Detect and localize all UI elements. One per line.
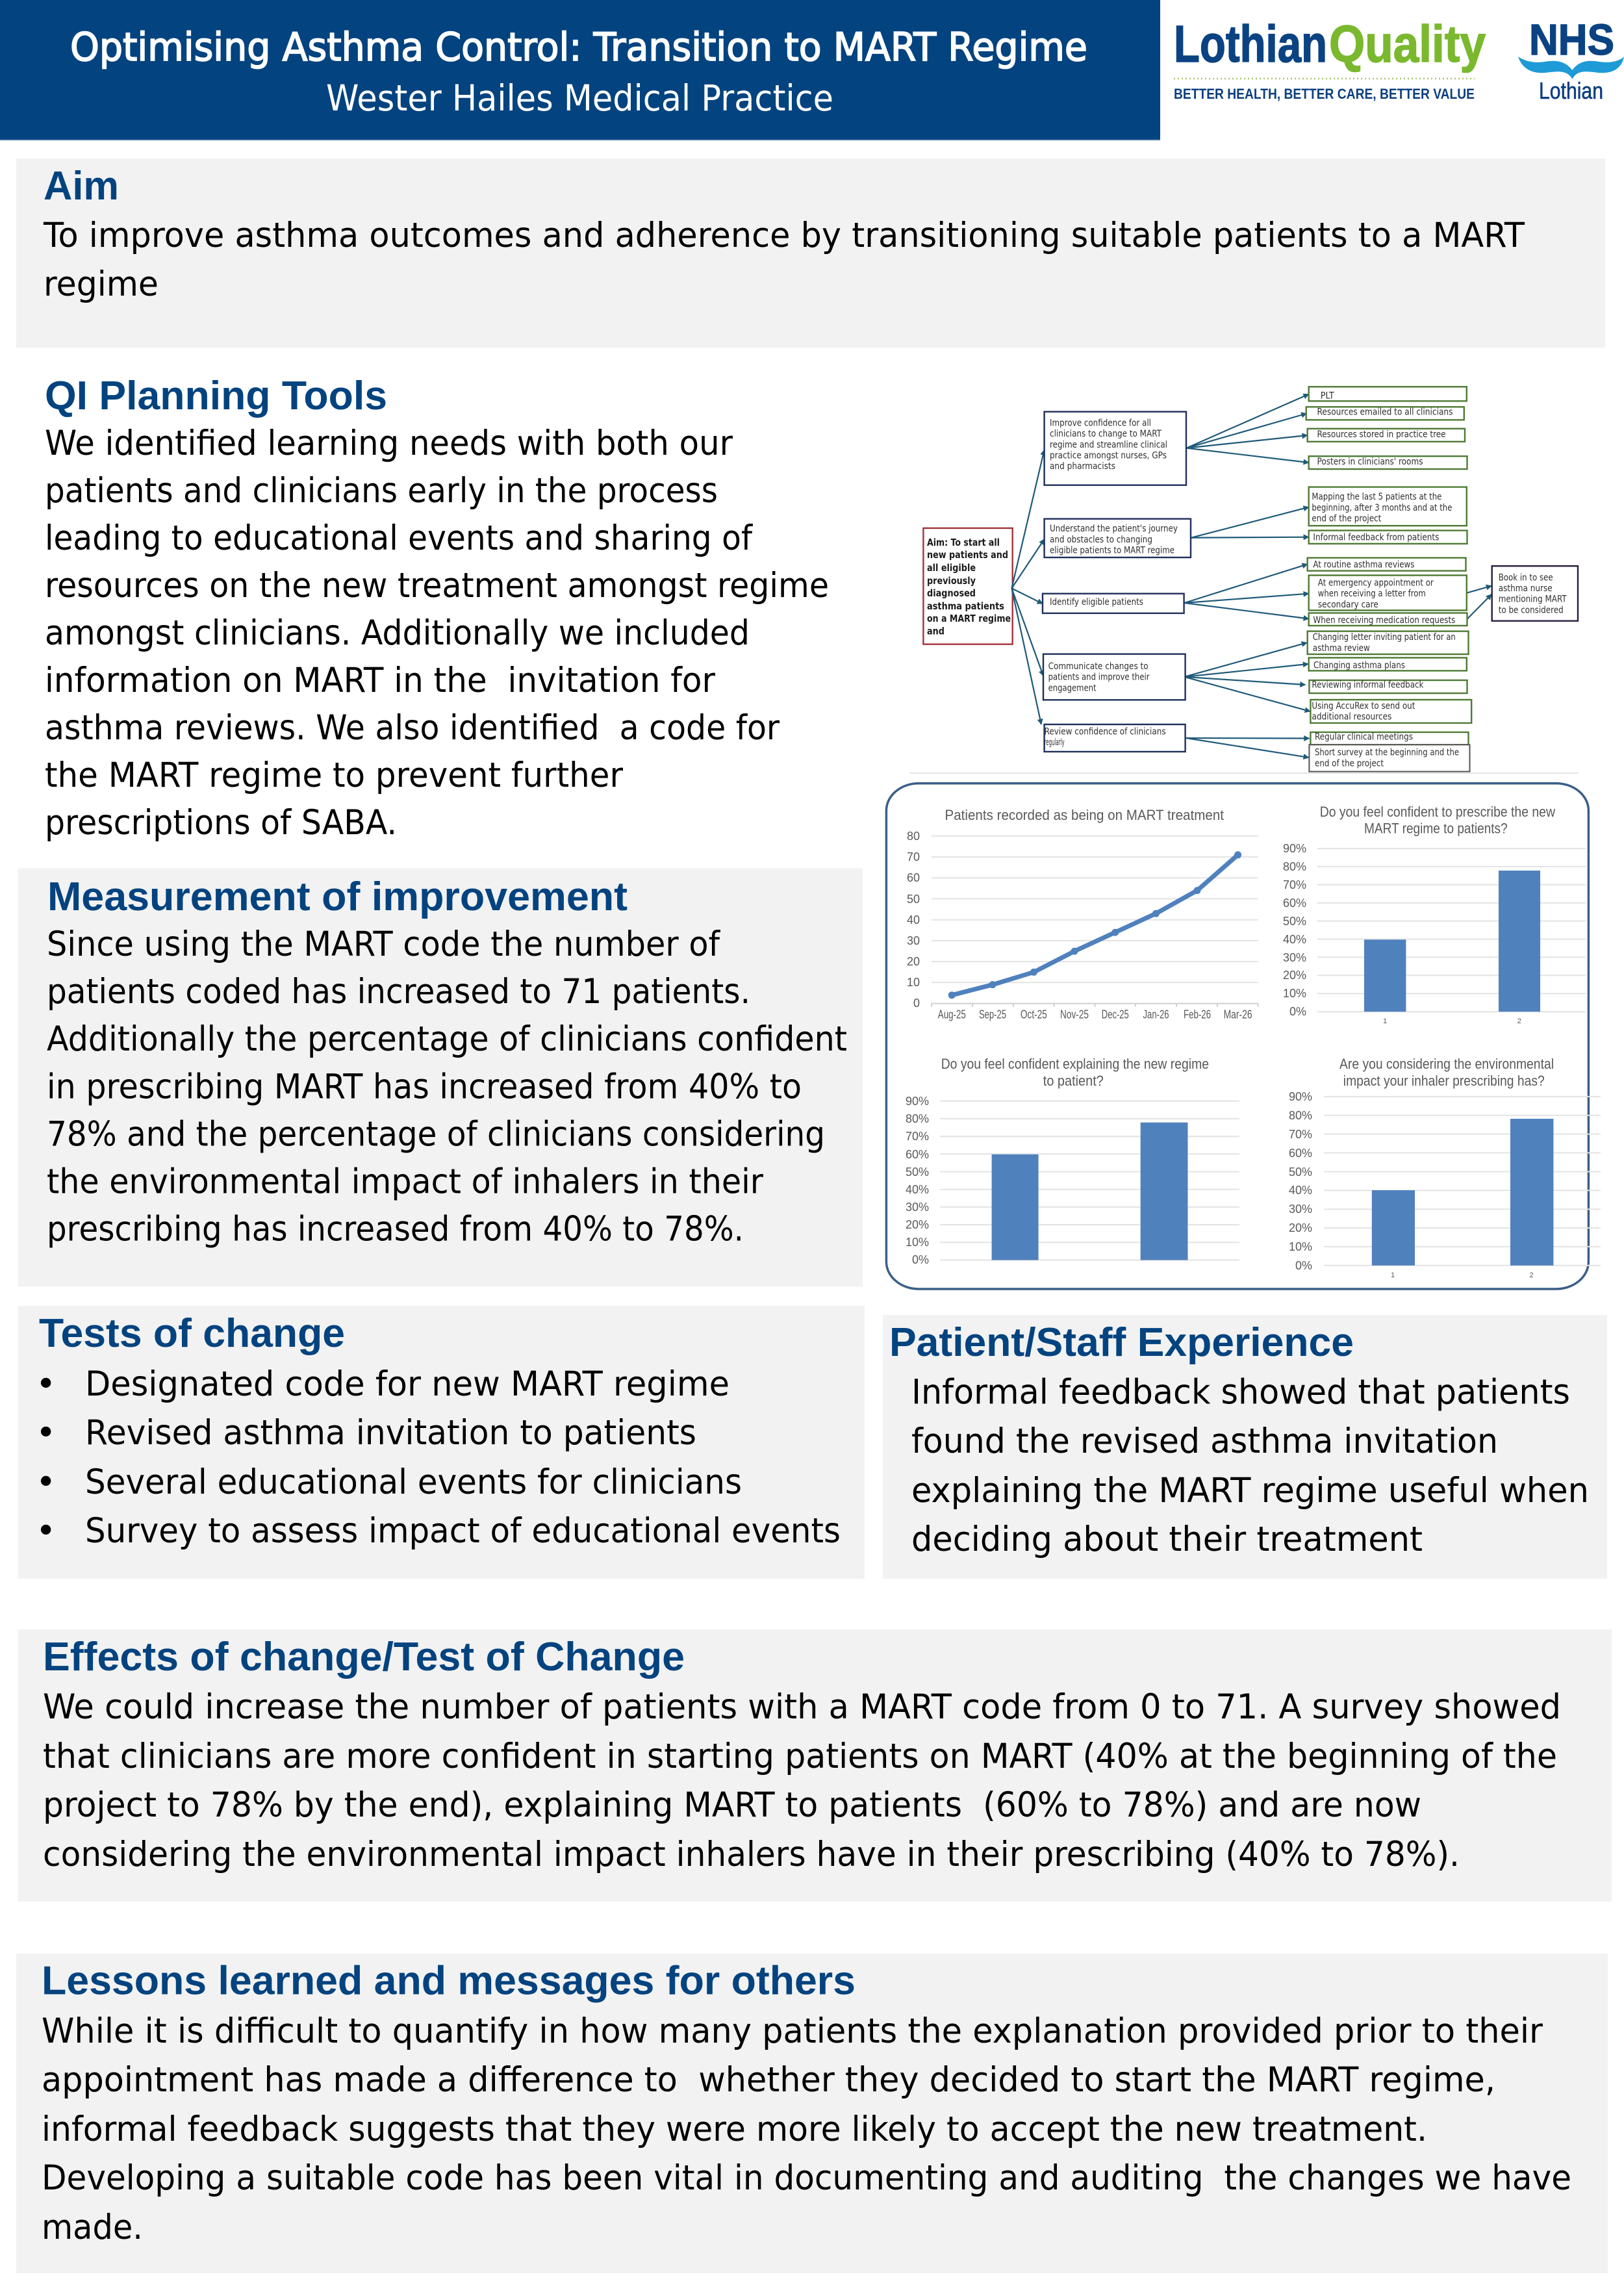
panel: tests of change bbox=[18, 1306, 865, 1579]
subtitle: Wester Hailes Medical Practice bbox=[326, 77, 833, 119]
QI planning text: the MART regime to prevent further bbox=[45, 756, 623, 795]
effects text: considering the environmental impact inhalers have in their prescribing (40% to 78%). bbox=[43, 1835, 1460, 1874]
bar chart: confident explaining: 80% bbox=[906, 1112, 929, 1125]
logo: Lothian Quality: BETTER HEALTH, BETTER CARE, BETTER VALUE bbox=[1174, 86, 1475, 102]
diagram: driver boxes: and obstacles to changing bbox=[1050, 535, 1152, 545]
panel: patient/staff experience bbox=[883, 1315, 1607, 1579]
bar chart: environmental impact: 0% bbox=[1295, 1259, 1312, 1272]
measurement text: the environmental impact of inhalers in their bbox=[47, 1162, 763, 1202]
diagram: driver boxes: engagement bbox=[1048, 683, 1097, 694]
panel: aim bbox=[16, 159, 1605, 348]
panel: lessons learned bbox=[16, 1954, 1608, 2273]
bar chart: environmental impact bbox=[1289, 1056, 1601, 1279]
line chart: patients on MART: 20 bbox=[907, 955, 920, 968]
diagram: change idea boxes: At routine asthma reviews bbox=[1313, 559, 1414, 570]
diagram: change idea boxes: when receiving a letter from bbox=[1318, 589, 1426, 599]
line chart: patients on MART: Mar-26 bbox=[1224, 1008, 1252, 1021]
diagram: driver boxes: patients and improve their bbox=[1048, 672, 1150, 683]
diagram: driver boxes bbox=[1043, 412, 1191, 752]
panel: QI planning tools bbox=[45, 374, 829, 843]
bar chart: confident explaining: to patient? bbox=[1043, 1073, 1104, 1089]
measurement text: 78% and the percentage of clinicians considering bbox=[47, 1115, 825, 1154]
bar chart: environmental impact: 30% bbox=[1289, 1203, 1312, 1216]
diagram: change idea boxes: Mapping the last 5 patients at the bbox=[1312, 492, 1442, 502]
bar chart: confident explaining bbox=[906, 1056, 1239, 1266]
bar chart: confident explaining: 70% bbox=[906, 1130, 929, 1143]
bar chart: confident explaining: 30% bbox=[906, 1201, 929, 1214]
diagram: aim box: Aim: To start all bbox=[927, 537, 1000, 548]
diagram: driver boxes: Identify eligible patients bbox=[1050, 597, 1143, 607]
lessons text bbox=[42, 2011, 1571, 2247]
diagram: driver boxes: eligible patients to MART regime bbox=[1050, 546, 1174, 556]
QI planning text: information on MART in the invitation for bbox=[45, 661, 715, 700]
logo: NHS Lothian: Lothian bbox=[1539, 77, 1603, 104]
aim text: To improve asthma outcomes and adherence by transitioning suitable patients to a MART bbox=[43, 216, 1525, 255]
diagram: driver boxes: clinicians to change to MART bbox=[1050, 429, 1161, 439]
bar chart: environmental impact: 80% bbox=[1289, 1109, 1312, 1122]
measurement text: patients coded has increased to 71 patients. bbox=[47, 972, 750, 1012]
diagram: change idea boxes: additional resources bbox=[1312, 712, 1391, 722]
diagram: change idea boxes: secondary care bbox=[1318, 600, 1378, 610]
lessons text: While it is difficult to quantify in how many patients the explanation provided prior to their bbox=[42, 2011, 1543, 2051]
bar chart: environmental impact: 40% bbox=[1289, 1184, 1312, 1197]
diagram: change idea boxes: Using AccuRex to send out bbox=[1312, 701, 1415, 711]
lessons text: Developing a suitable code has been vital in documenting and auditing the changes we have bbox=[42, 2158, 1571, 2198]
bar chart: environmental impact: 2 bbox=[1529, 1271, 1534, 1279]
bar chart: confident to prescribe: Do you feel confident to prescribe the new bbox=[1320, 804, 1555, 820]
bar chart: confident to prescribe: 30% bbox=[1283, 951, 1306, 964]
line chart: patients on MART: 30 bbox=[907, 934, 920, 947]
logo: Lothian Quality: Quality bbox=[1329, 15, 1486, 73]
bar chart: confident explaining: 10% bbox=[906, 1236, 929, 1249]
QI planning text: We identified learning needs with both our bbox=[45, 424, 733, 463]
diagram: aim box: new patients and bbox=[927, 549, 1008, 561]
bar chart: environmental impact: 60% bbox=[1289, 1147, 1312, 1160]
diagram: change idea boxes: Changing asthma plans bbox=[1313, 660, 1405, 670]
QI planning text: patients and clinicians early in the process bbox=[45, 471, 718, 511]
diagram: book in box: mentioning MART bbox=[1499, 594, 1567, 605]
line chart: patients on MART: 40 bbox=[907, 913, 920, 926]
diagram: change idea boxes: Short survey at the beginning and the bbox=[1315, 748, 1459, 758]
line chart: patients on MART bbox=[907, 807, 1258, 1021]
bar chart: environmental impact: 10% bbox=[1289, 1240, 1312, 1253]
line chart: patients on MART: 80 bbox=[907, 830, 920, 843]
panel: charts bbox=[886, 784, 1601, 1289]
effects text bbox=[43, 1687, 1561, 1874]
diagram: aim box: diagnosed bbox=[927, 587, 976, 599]
QI planning text: resources on the new treatment amongst regime bbox=[45, 566, 829, 606]
bar chart: confident to prescribe: 0% bbox=[1289, 1005, 1306, 1018]
logo: NHS Lothian bbox=[1518, 16, 1624, 104]
bar chart: confident explaining: 20% bbox=[906, 1218, 929, 1231]
diagram: change idea boxes: end of the project bbox=[1315, 758, 1384, 769]
line chart: patients on MART: Jan-26 bbox=[1143, 1008, 1169, 1021]
bar chart: confident to prescribe: 2 bbox=[1517, 1017, 1521, 1025]
diagram: aim box: and bbox=[927, 625, 945, 637]
diagram: driver boxes: regularly bbox=[1045, 737, 1065, 748]
experience text: explaining the MART regime useful when bbox=[911, 1471, 1589, 1511]
bar chart: environmental impact: 50% bbox=[1289, 1166, 1312, 1179]
bar chart: environmental impact: 70% bbox=[1289, 1128, 1312, 1141]
bar chart: confident explaining: Do you feel confident explaining the new regime bbox=[941, 1056, 1209, 1072]
bar chart: confident to prescribe: 90% bbox=[1283, 842, 1306, 855]
heading: aim: Aim bbox=[44, 164, 119, 209]
logo: NHS Lothian: NHS bbox=[1529, 16, 1614, 64]
diagram: change idea boxes: beginning, after 3 months and at the bbox=[1312, 503, 1453, 513]
heading: tests of change: Tests of change bbox=[39, 1311, 345, 1356]
bar chart: environmental impact: impact your inhaler prescribing has? bbox=[1343, 1073, 1545, 1089]
bullet list: Several educational events for clinicians bbox=[85, 1462, 742, 1502]
bar chart: confident explaining: 90% bbox=[906, 1095, 929, 1108]
title: Optimising Asthma Control: Transition to MART Regime bbox=[70, 25, 1087, 70]
bar chart: confident to prescribe: 40% bbox=[1283, 933, 1306, 946]
bullet list bbox=[36, 1364, 841, 1551]
experience text bbox=[911, 1372, 1589, 1559]
diagram: driver boxes: and pharmacists bbox=[1050, 461, 1115, 472]
line chart: patients on MART: Sep-25 bbox=[979, 1008, 1006, 1021]
diagram: change idea boxes: Resources stored in practice tree bbox=[1317, 429, 1446, 440]
heading: patient/staff experience: Patient/Staff Experience bbox=[889, 1320, 1354, 1365]
bar chart: confident to prescribe: 60% bbox=[1283, 897, 1306, 910]
line chart: patients on MART: 70 bbox=[907, 850, 920, 863]
effects text: We could increase the number of patients with a MART code from 0 to 71. A survey showed bbox=[43, 1687, 1561, 1727]
diagram: driver boxes: regime and streamline clinical bbox=[1050, 440, 1167, 450]
bullet list: • bbox=[36, 1413, 56, 1453]
bar chart: environmental impact: 90% bbox=[1289, 1090, 1312, 1103]
diagram: change idea boxes: When receiving medication requests bbox=[1313, 615, 1455, 626]
diagram: change idea boxes: Informal feedback from patients bbox=[1313, 533, 1439, 543]
QI planning text: amongst clinicians. Additionally we included bbox=[45, 613, 750, 653]
heading: lessons learned: Lessons learned and messages for others bbox=[42, 1958, 856, 2004]
diagram: driver boxes: Understand the patient's journey bbox=[1050, 524, 1178, 534]
effects text: project to 78% by the end), explaining MART to patients (60% to 78%) and are now bbox=[43, 1785, 1421, 1825]
diagram: aim box: on a MART regime bbox=[927, 613, 1011, 624]
diagram: change idea boxes: PLT bbox=[1321, 391, 1334, 402]
diagram: change idea boxes bbox=[1306, 387, 1471, 772]
header banner bbox=[0, 0, 1160, 140]
line chart: patients on MART: 0 bbox=[913, 997, 920, 1010]
experience text: Informal feedback showed that patients bbox=[911, 1372, 1570, 1412]
panel: measurement of improvement bbox=[18, 868, 863, 1286]
effects text: that clinicians are more confident in starting patients on MART (40% at the beginning of the bbox=[43, 1737, 1557, 1776]
line chart: patients on MART: Patients recorded as being on MART treatment bbox=[945, 807, 1224, 823]
diagram: book in box bbox=[1492, 566, 1578, 621]
experience text: deciding about their treatment bbox=[911, 1520, 1423, 1559]
diagram: aim box: previously bbox=[927, 575, 976, 587]
bar chart: confident to prescribe: 10% bbox=[1283, 987, 1306, 1000]
diagram: driver boxes: Review confidence of clinicians bbox=[1045, 726, 1166, 737]
bullet list: • bbox=[36, 1364, 56, 1404]
logo: Lothian Quality bbox=[1174, 15, 1486, 102]
diagram: driver boxes: Improve confidence for all bbox=[1050, 418, 1151, 429]
aim text bbox=[43, 216, 1525, 304]
measurement text: in prescribing MART has increased from 40% to bbox=[47, 1067, 802, 1107]
lessons text: appointment has made a difference to whether they decided to start the MART regime, bbox=[42, 2060, 1495, 2100]
bar chart: confident explaining: 60% bbox=[906, 1148, 929, 1161]
bar chart: environmental impact: 20% bbox=[1289, 1221, 1312, 1234]
diagram: book in box: asthma nurse bbox=[1499, 583, 1553, 594]
diagram: change idea boxes: Posters in clinicians' rooms bbox=[1317, 457, 1423, 467]
heading: effects of change: Effects of change/Test of Change bbox=[43, 1635, 685, 1679]
bar chart: confident explaining: 0% bbox=[912, 1253, 929, 1266]
diagram: change idea boxes: At emergency appointment or bbox=[1318, 578, 1434, 588]
bar chart: confident explaining: 50% bbox=[906, 1166, 929, 1179]
lessons text: made. bbox=[42, 2208, 143, 2247]
line chart: patients on MART: Oct-25 bbox=[1021, 1008, 1047, 1021]
diagram: aim box: asthma patients bbox=[927, 600, 1004, 612]
bar chart: confident to prescribe: 1 bbox=[1383, 1017, 1387, 1025]
measurement text: prescribing has increased from 40% to 78%. bbox=[47, 1210, 744, 1249]
bar chart: confident explaining: 40% bbox=[906, 1183, 929, 1196]
bullet list: Designated code for new MART regime bbox=[85, 1364, 730, 1404]
bar chart: environmental impact: 1 bbox=[1391, 1271, 1395, 1279]
bar chart: confident to prescribe: MART regime to patients? bbox=[1364, 821, 1508, 837]
diagram: book in box: Book in to see bbox=[1499, 572, 1553, 583]
diagram: book in box: to be considered bbox=[1499, 606, 1564, 616]
bullet list: • bbox=[36, 1511, 56, 1551]
bullet list: • bbox=[36, 1462, 56, 1502]
diagram: aim box bbox=[923, 528, 1013, 644]
bar chart: confident to prescribe: 50% bbox=[1283, 915, 1306, 928]
panel: effects of change bbox=[18, 1629, 1612, 1902]
measurement text: Additionally the percentage of clinicians confident bbox=[47, 1019, 847, 1059]
bullet list: Survey to assess impact of educational events bbox=[85, 1511, 841, 1551]
diagram: change idea boxes: Changing letter inviting patient for an bbox=[1313, 632, 1456, 643]
QI planning text bbox=[45, 424, 829, 843]
line chart: patients on MART: Aug-25 bbox=[938, 1008, 966, 1021]
heading: measurement: Measurement of improvement bbox=[47, 874, 628, 919]
diagram: arrows bbox=[1011, 394, 1491, 758]
diagram: driver boxes: practice amongst nurses, GPs bbox=[1050, 451, 1167, 461]
line chart: patients on MART: 10 bbox=[907, 976, 920, 989]
diagram: driver boxes: Communicate changes to bbox=[1048, 661, 1148, 672]
diagram: change idea boxes: Regular clinical meetings bbox=[1315, 732, 1413, 743]
line chart: patients on MART: Dec-25 bbox=[1102, 1008, 1129, 1021]
diagram: aim box: all eligible bbox=[927, 562, 976, 574]
QI planning text: asthma reviews. We also identified a code for bbox=[45, 708, 780, 748]
aim text: regime bbox=[44, 264, 159, 304]
diagram: change idea boxes: end of the project bbox=[1312, 514, 1382, 524]
bar chart: confident to prescribe: 70% bbox=[1283, 878, 1306, 891]
measurement text: Since using the MART code the number of bbox=[47, 925, 720, 964]
line chart: patients on MART: Nov-25 bbox=[1060, 1008, 1089, 1021]
diagram: change idea boxes: Reviewing informal feedback bbox=[1312, 680, 1424, 691]
diagram: change idea boxes: asthma review bbox=[1313, 643, 1370, 654]
QI planning text: prescriptions of SABA. bbox=[45, 803, 397, 843]
diagram: change idea boxes: Resources emailed to all clinicians bbox=[1317, 407, 1453, 418]
lessons text: informal feedback suggests that they were more likely to accept the new treatment. bbox=[42, 2110, 1427, 2149]
line chart: patients on MART: Feb-26 bbox=[1184, 1008, 1211, 1021]
measurement text bbox=[47, 925, 847, 1249]
heading: QI planning tools: QI Planning Tools bbox=[45, 374, 387, 418]
bar chart: confident to prescribe: 20% bbox=[1283, 969, 1306, 982]
driver diagram bbox=[909, 387, 1579, 773]
bullet list: Revised asthma invitation to patients bbox=[85, 1413, 696, 1453]
bar chart: confident to prescribe bbox=[1283, 804, 1586, 1025]
bar chart: confident to prescribe: 80% bbox=[1283, 860, 1306, 873]
bar chart: environmental impact: Are you considering the environmental bbox=[1339, 1056, 1554, 1072]
line chart: patients on MART: 50 bbox=[907, 893, 920, 906]
experience text: found the revised asthma invitation bbox=[911, 1422, 1498, 1461]
line chart: patients on MART: 60 bbox=[907, 871, 920, 884]
logo: Lothian Quality: Lothian bbox=[1174, 15, 1327, 73]
QI planning text: leading to educational events and sharing of bbox=[45, 518, 753, 558]
